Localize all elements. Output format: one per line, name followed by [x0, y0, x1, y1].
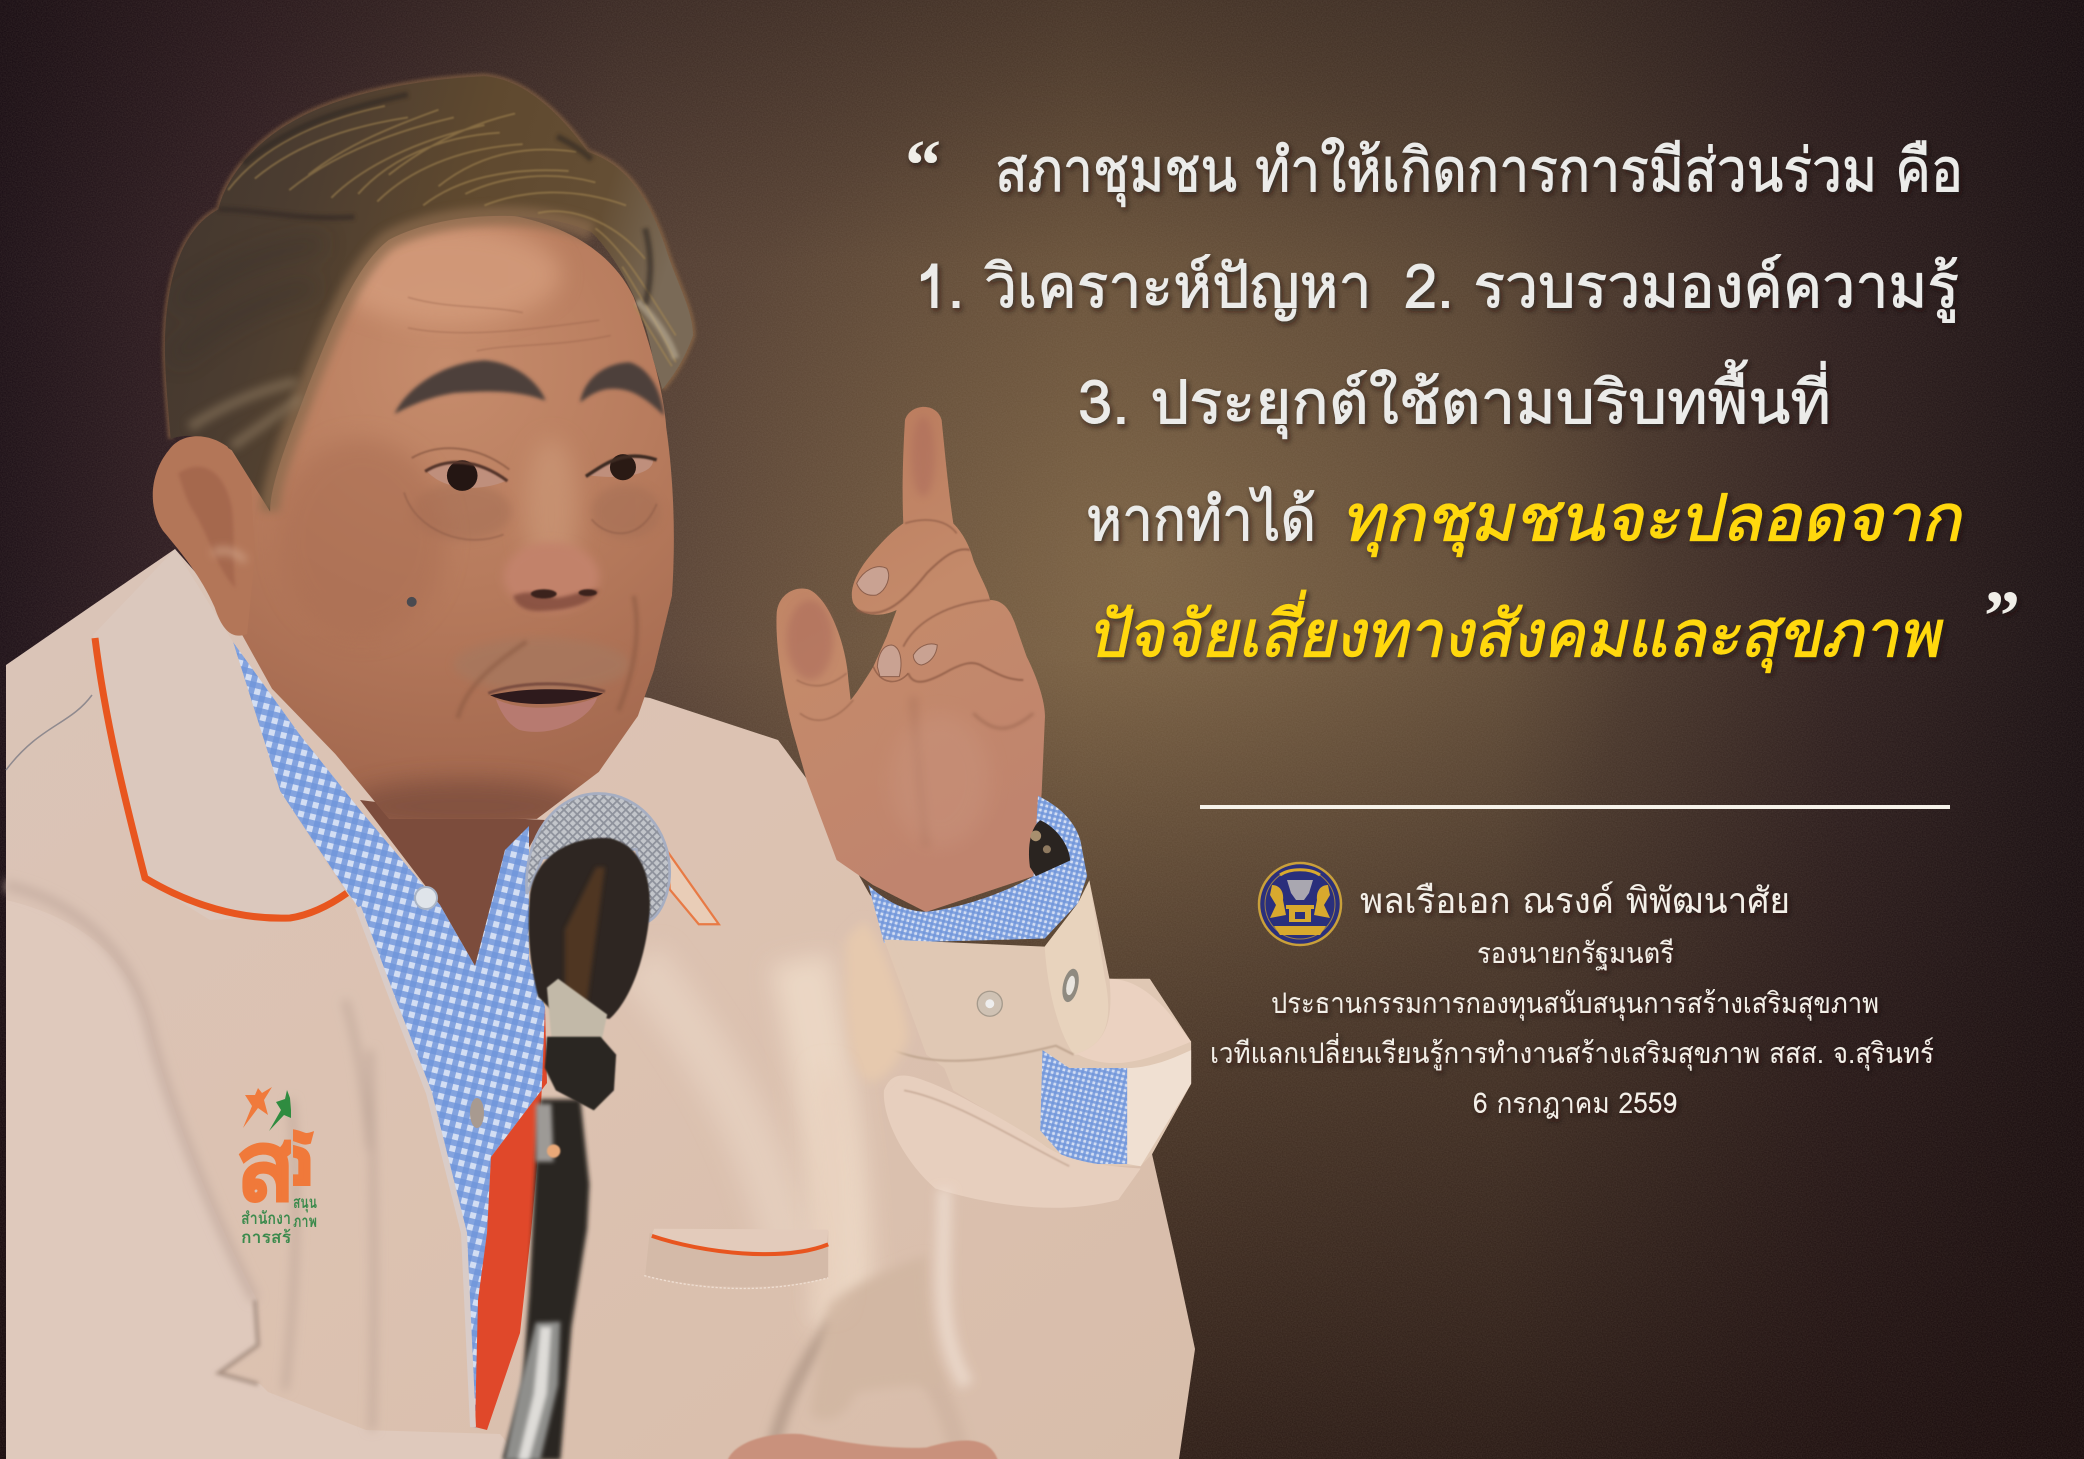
divider rule: [1200, 805, 1950, 809]
finger shading: [797, 520, 1033, 847]
mic body: [529, 838, 650, 1019]
hand resting at bottom: [728, 1434, 998, 1459]
jacket cuff: [884, 881, 1191, 1166]
cuff buttons: [977, 967, 1082, 1016]
microphone: [502, 793, 670, 1459]
sleeve fold: [884, 1076, 1141, 1208]
logo caption: สนุน: [293, 1189, 317, 1216]
jacket pocket: [644, 1229, 828, 1288]
quote line 4 white: หากทำได้: [1086, 472, 1316, 567]
mic clip: [547, 979, 607, 1046]
neck: [360, 800, 545, 966]
jacket collar: [6, 549, 347, 920]
quote line 3: 3. ประยุกต์ใช้ตามบริบทพื้นที่: [1078, 355, 1831, 450]
mic stand lower: [502, 1099, 589, 1459]
zipper edge: [358, 907, 473, 1427]
shirt: [233, 642, 547, 1428]
hair: [165, 76, 693, 512]
orange placket: [475, 1007, 547, 1430]
under-arm shading: [846, 921, 909, 1081]
nose: [513, 589, 599, 611]
attribution: [1210, 872, 1934, 1126]
role line 1: รองนายกรัฐมนตรี: [1477, 930, 1674, 976]
opening quote: “: [905, 125, 941, 205]
hair glow: [165, 76, 693, 439]
date: 6 กรกฎาคม 2559: [1473, 1080, 1677, 1126]
jacket body: [6, 549, 1195, 1459]
closing quote: ”: [1984, 576, 2020, 656]
logo caption: [241, 1189, 317, 1251]
event line: เวทีแลกเปลี่ยนเรียนรู้การทำงานสร้างเสริมสุขภาพ สสส. จ.สุรินทร์: [1210, 1030, 1934, 1076]
fingernails: [857, 567, 937, 677]
role line 2: ประธานกรรมการกองทุนสนับสนุนการสร้างเสริมสุขภาพ: [1271, 980, 1879, 1026]
speaker name: พลเรือเอก ณรงค์ พิพัฒนาศัย: [1360, 872, 1790, 929]
quote line 4 yellow: ทุกชุมชนจะปลอดจาก: [1341, 467, 1961, 569]
quote text: [905, 123, 2020, 685]
eyes: [412, 448, 657, 491]
right collar tip: [667, 852, 719, 924]
raised hand: [776, 407, 1045, 912]
logo caption: สำนักงา: [241, 1205, 291, 1232]
inner cuff gingham: [1040, 1050, 1127, 1164]
shirt cuff and jacket sleeve: [644, 796, 1191, 1459]
jacket logo: [238, 1087, 317, 1243]
logo stars: [243, 1087, 291, 1131]
quote line 1: สภาชุมชน ทำให้เกิดการการมีส่วนร่วม คือ: [995, 123, 1963, 218]
logo mark: [238, 1129, 314, 1203]
logo caption: ภาพ: [293, 1208, 317, 1235]
photo: speaker: [6, 76, 1195, 1459]
logo mark: ธ: [262, 1077, 318, 1224]
shirt cuff: [868, 796, 1087, 943]
face: [228, 210, 674, 833]
eyebrows: [394, 360, 664, 416]
mouth: [488, 684, 605, 732]
quote line 2: 1. วิเคราะห์ปัญหา 2. รวบรวมองค์ความรู้: [915, 239, 1959, 334]
head: [153, 76, 693, 833]
mole: [407, 597, 417, 607]
logo caption: การสร้: [241, 1224, 291, 1251]
mic grille: [526, 793, 670, 921]
logo mark: ส: [236, 1088, 296, 1244]
quote line 5 yellow: ปัจจัยเสี่ยงทางสังคมและสุขภาพ: [1087, 583, 1944, 685]
seal emblem: [1259, 863, 1341, 945]
ear: [153, 436, 255, 636]
